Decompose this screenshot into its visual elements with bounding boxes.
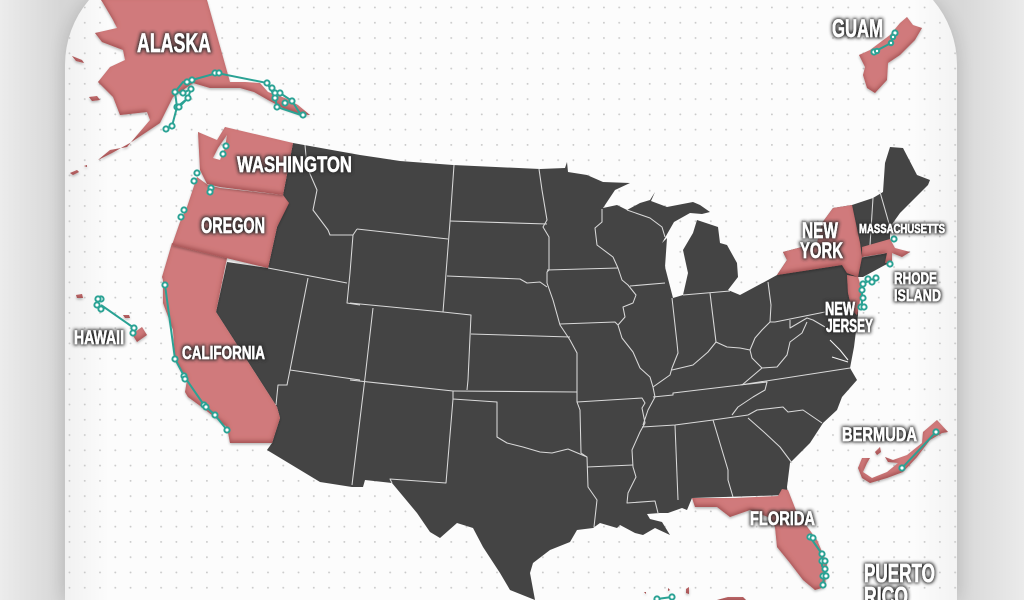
Bermuda xyxy=(858,420,948,483)
label: Rhode Island: ISLAND xyxy=(894,286,941,305)
state: Alaska xyxy=(95,0,310,160)
state: New York xyxy=(777,205,862,277)
Puerto Rico and Caribbean islands xyxy=(644,587,746,600)
state: Oregon xyxy=(172,177,289,268)
label: Rhode Island: RHODE xyxy=(894,269,937,288)
Hawaii islands xyxy=(76,294,147,342)
state: Massachusetts and Rhode Island xyxy=(862,239,910,263)
label: Oregon: OREGON xyxy=(201,213,265,238)
state: Florida xyxy=(692,489,827,590)
label: Guam: GUAM xyxy=(832,15,883,43)
dark landmass xyxy=(216,143,930,600)
label: Hawaii: HAWAII xyxy=(74,328,124,349)
state: Washington xyxy=(198,127,293,195)
map: contiguous United States xyxy=(216,143,930,600)
teal circles xyxy=(94,30,939,600)
label: Alaska: ALASKA xyxy=(137,28,211,58)
state: California xyxy=(162,243,280,443)
label: Rhode Island xyxy=(894,269,941,305)
coastal site markers xyxy=(94,30,939,600)
label: California: CALIFORNIA xyxy=(182,343,265,363)
label: New Jersey xyxy=(825,299,873,336)
Alaska islands xyxy=(70,56,100,175)
label: New York: YORK xyxy=(800,238,843,263)
state boundaries xyxy=(268,145,890,527)
label: New York: NEW xyxy=(802,218,838,243)
label: New York xyxy=(800,218,843,263)
label: Massachusetts: MASSACHUSETTS xyxy=(859,222,945,236)
label: Puerto Rico: PUERTO xyxy=(864,558,935,588)
state: New Jersey xyxy=(847,275,862,315)
label: New Jersey: JERSEY xyxy=(826,316,873,336)
label: New Jersey: NEW xyxy=(825,299,855,319)
teal routes xyxy=(101,33,936,599)
label: Florida: FLORIDA xyxy=(750,509,815,530)
label: Puerto Rico xyxy=(864,558,935,600)
label: Bermuda: BERMUDA xyxy=(842,425,917,446)
label: Washington: WASHINGTON xyxy=(237,152,352,177)
Guam xyxy=(859,17,922,93)
